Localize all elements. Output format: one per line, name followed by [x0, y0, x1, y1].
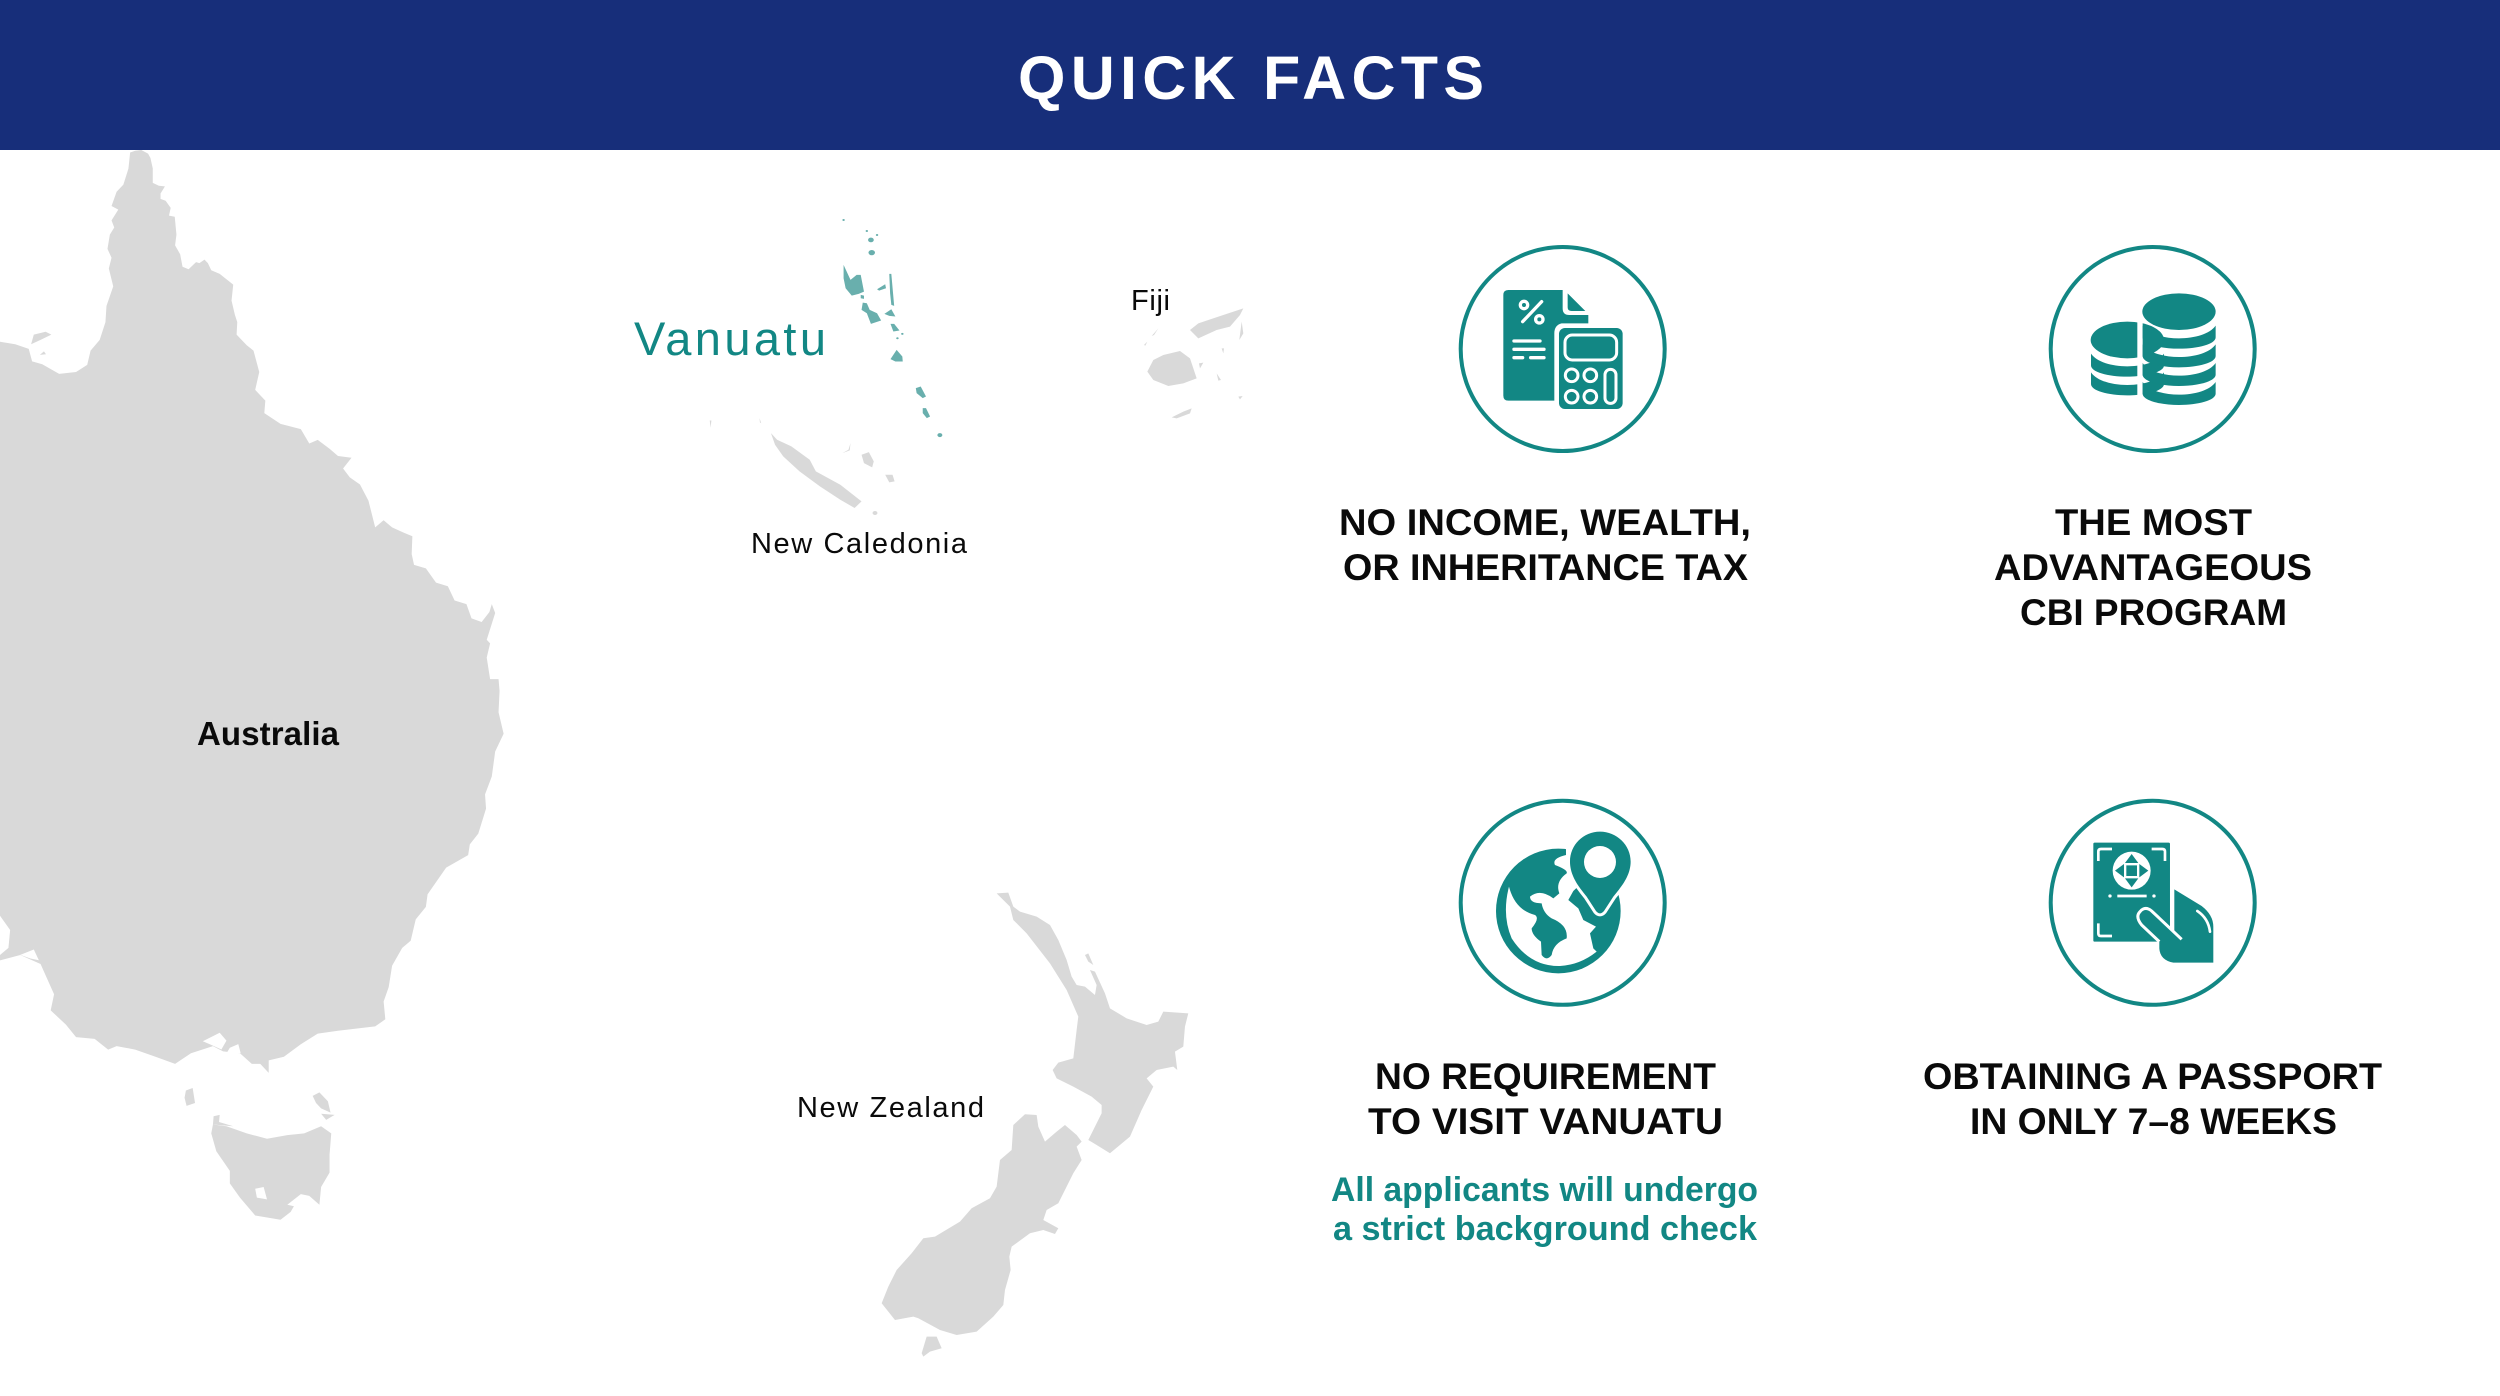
heading: fast passport: IN ONLY 7–8 WEEKS: [1970, 1101, 2337, 1142]
Tasmania: [185, 1088, 335, 1220]
heading: no visit requirement: TO VISIT VANUATU: [1368, 1101, 1723, 1142]
icon: hand holding passport: [2051, 801, 2255, 1005]
heading: no visit requirement: NO REQUIREMENT: [1375, 1056, 1716, 1097]
map: Fiji: [1131, 285, 1243, 418]
map: Vanuatu: [634, 219, 942, 437]
note: background check: All applicants will undergo: [1331, 1171, 1758, 1209]
label: Fiji: Fiji: [1131, 285, 1170, 317]
heading: no tax: NO INCOME, WEALTH,: [1339, 502, 1751, 543]
header banner: [0, 0, 2500, 150]
fact: no visit requirement: [1331, 801, 1758, 1248]
Fiji islands: [1144, 308, 1243, 418]
label: New Zealand: New Zealand: [797, 1092, 984, 1124]
note: background check: a strict background check: [1333, 1210, 1757, 1248]
fact: no tax: [1339, 247, 1751, 588]
map: Australia: [0, 150, 504, 1220]
New Caledonia islands: [710, 418, 895, 515]
label: New Caledonia: New Caledonia: [751, 528, 968, 560]
map: New Zealand: [797, 893, 1188, 1357]
heading: no tax: OR INHERITANCE TAX: [1343, 547, 1748, 588]
Vanuatu islands: [842, 219, 942, 437]
Australia mainland: [0, 150, 504, 1073]
fact: CBI program: [1994, 247, 2312, 633]
heading: CBI program: THE MOST: [2055, 502, 2252, 543]
map: New Caledonia: [710, 418, 968, 560]
icon: globe with location pin: [1461, 801, 1665, 1005]
heading: fast passport: [1923, 1056, 2382, 1142]
heading: no tax: [1339, 502, 1751, 588]
label: Australia: Australia: [197, 715, 340, 752]
heading: CBI program: ADVANTAGEOUS: [1994, 547, 2312, 588]
heading: CBI program: [1994, 502, 2312, 633]
heading: CBI program: CBI PROGRAM: [2020, 592, 2287, 633]
note: background check: [1331, 1171, 1758, 1248]
heading: fast passport: OBTAINING A PASSPORT: [1923, 1056, 2382, 1097]
New Zealand islands: [882, 893, 1188, 1357]
icon: tax document and calculator: [1461, 247, 1665, 451]
label: Vanuatu: Vanuatu: [634, 312, 826, 365]
heading: no visit requirement: [1368, 1056, 1723, 1142]
Port Phillip bay: [20, 950, 241, 1053]
title: QUICK FACTS: [1018, 44, 1484, 112]
fact: fast passport: [1923, 801, 2382, 1142]
icon: coin stacks: [2051, 247, 2255, 451]
